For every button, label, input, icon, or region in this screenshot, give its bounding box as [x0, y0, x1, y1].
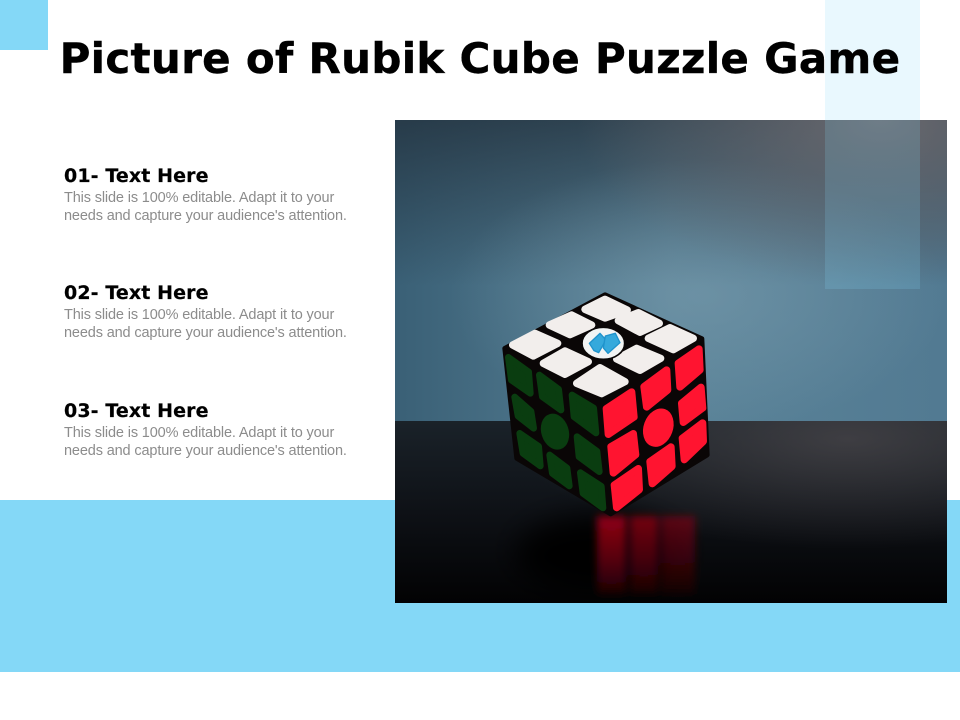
photo: rubik cube on dark table	[395, 120, 947, 603]
text block 01: This slide is 100% editable. Adapt it to your	[64, 190, 334, 206]
red stickers	[606, 349, 703, 508]
icon: rubik cube	[505, 295, 707, 514]
bottom blue band	[0, 500, 960, 672]
center logo	[582, 327, 625, 359]
text block 02	[64, 282, 347, 341]
text block 03	[64, 400, 347, 459]
text block 03: needs and capture your audience's attention.	[64, 443, 347, 459]
green stickers	[508, 357, 603, 508]
text block 01: 01- Text Here	[64, 165, 209, 187]
corner accent square	[0, 0, 48, 50]
text block 02: needs and capture your audience's attention.	[64, 325, 347, 341]
white stickers	[513, 299, 693, 394]
text block 01	[64, 165, 347, 224]
cube body	[505, 295, 707, 514]
text block 01: needs and capture your audience's attention.	[64, 208, 347, 224]
translucent blue accent panel	[825, 0, 920, 289]
text block 03: This slide is 100% editable. Adapt it to your	[64, 425, 334, 441]
text block 02: This slide is 100% editable. Adapt it to your	[64, 307, 334, 323]
text block 02: 02- Text Here	[64, 282, 209, 304]
text block 03: 03- Text Here	[64, 400, 209, 422]
title: Picture of Rubik Cube Puzzle Game	[60, 34, 900, 83]
